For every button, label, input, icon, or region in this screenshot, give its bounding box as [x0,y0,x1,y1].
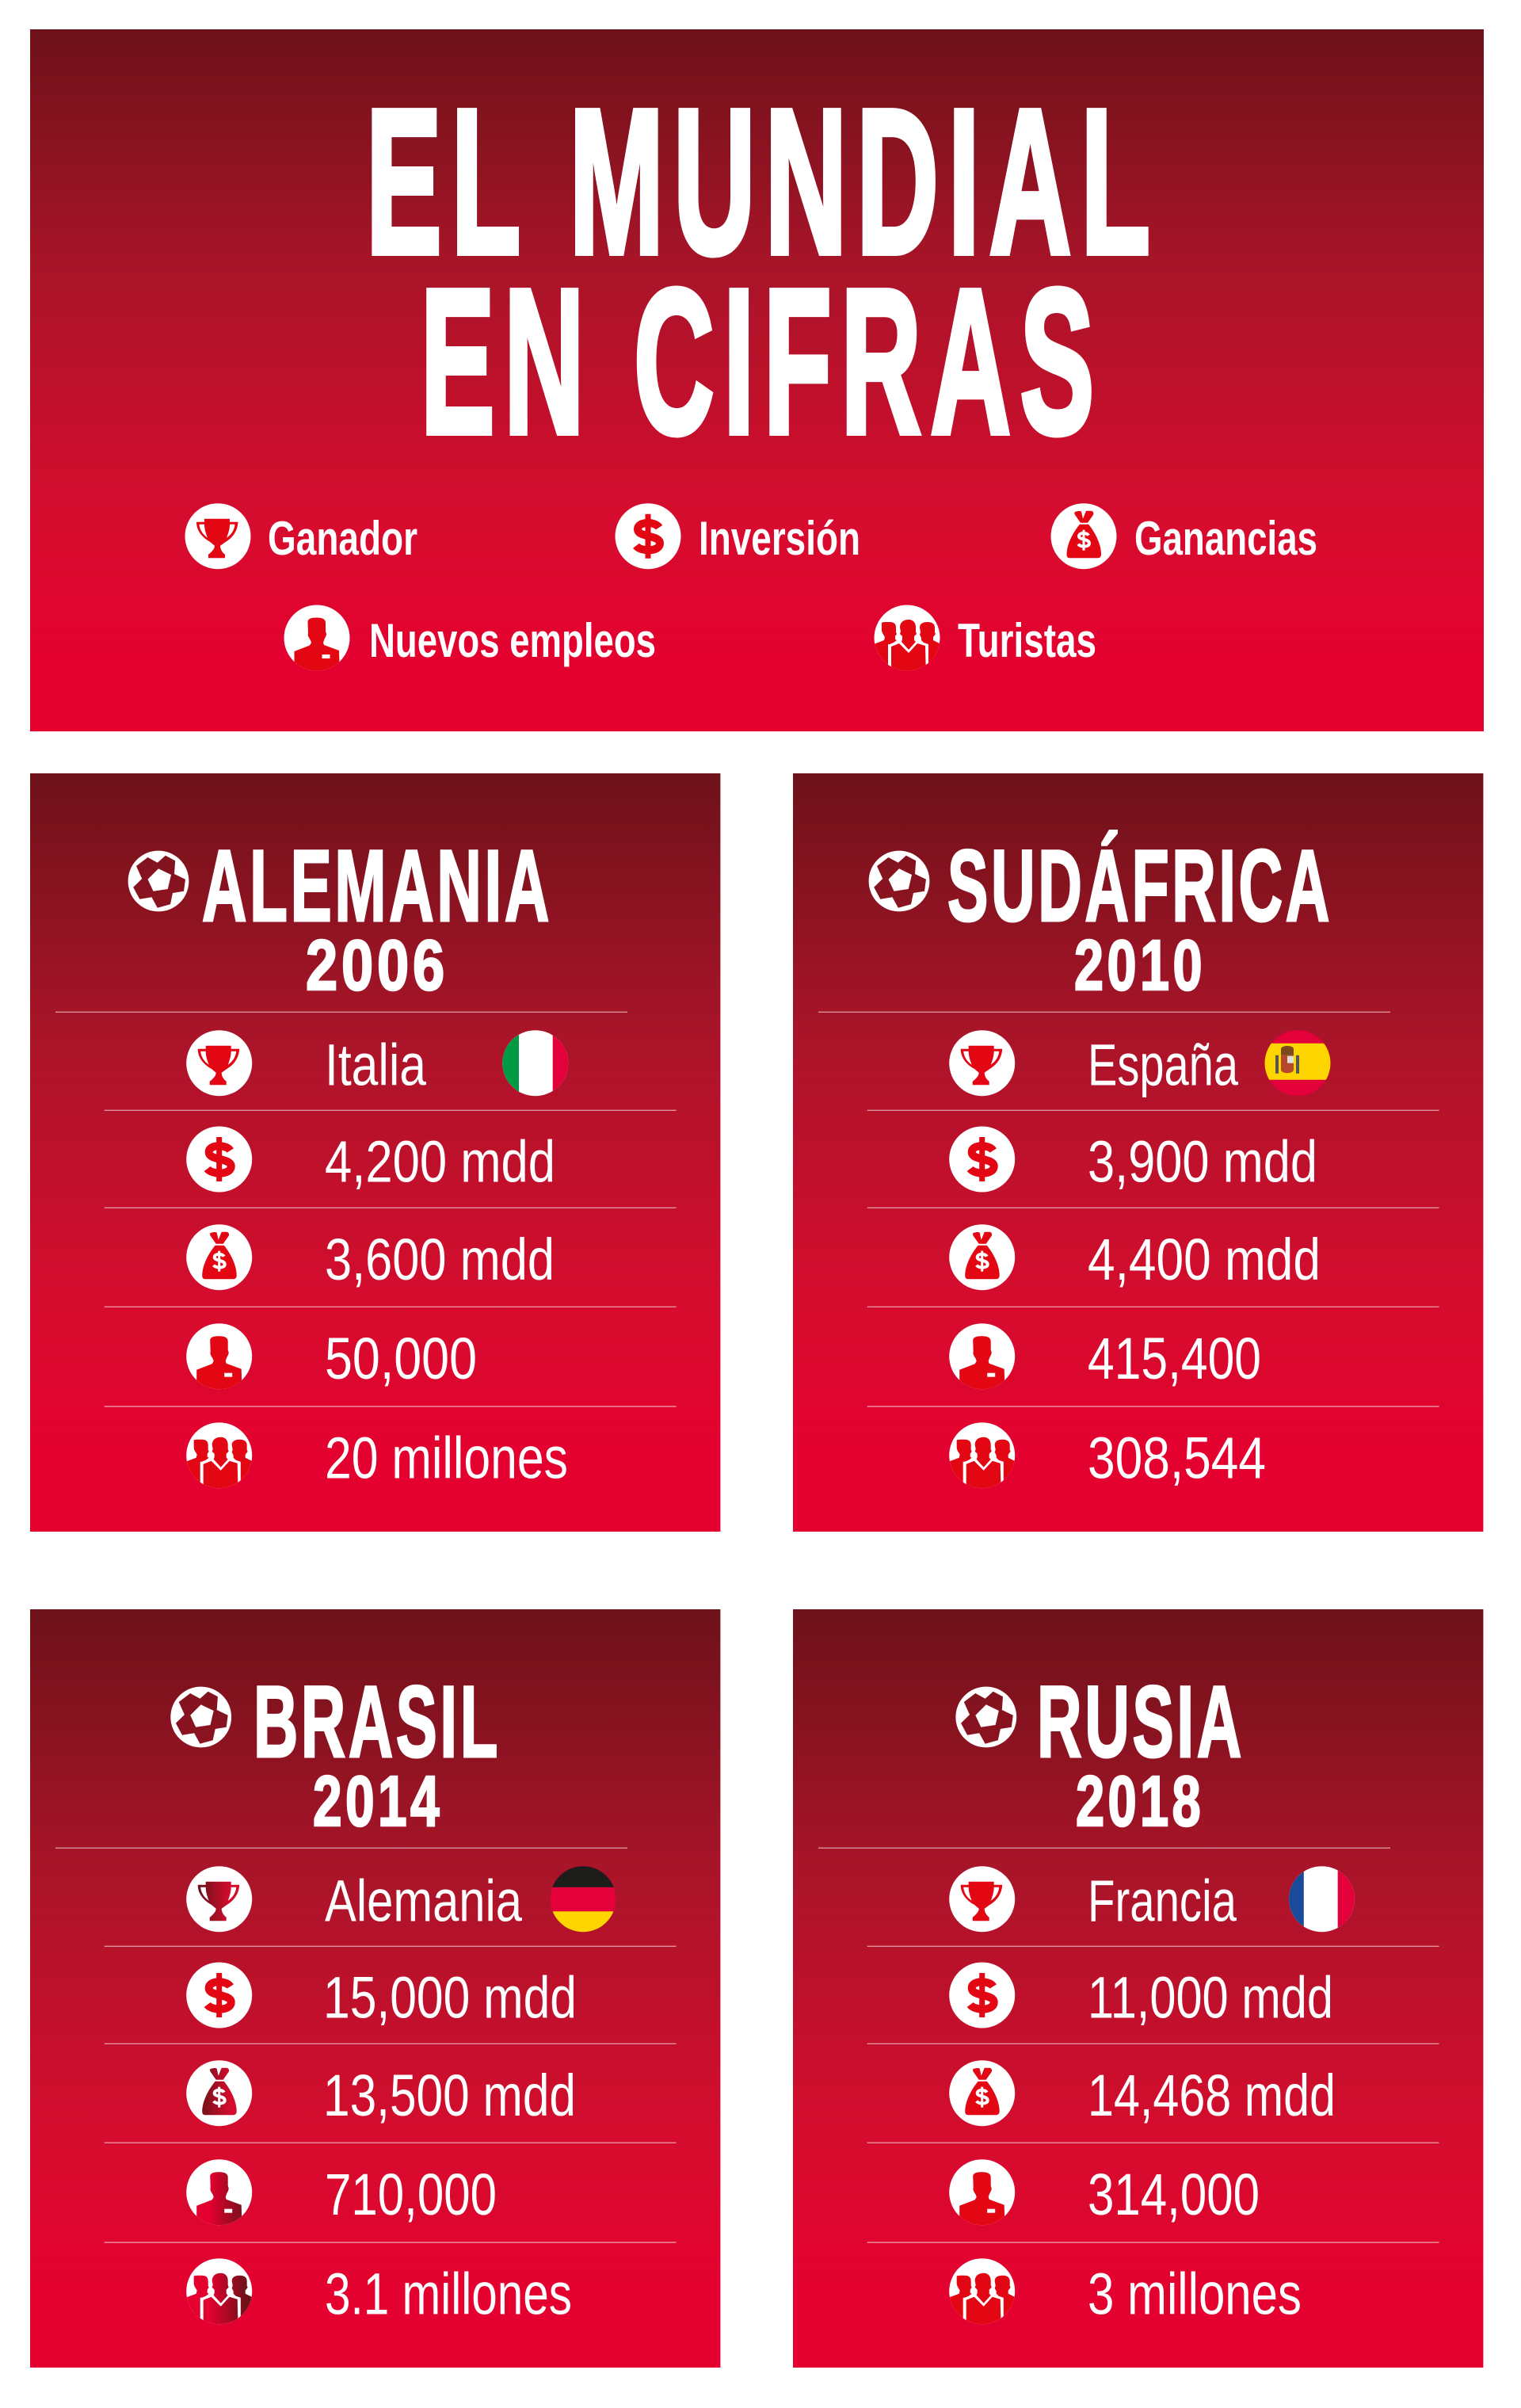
year: 2010 [1074,926,1206,1006]
investment: 11,000 mdd [1088,1965,1333,2030]
icon: money bag [186,1224,252,1290]
new jobs: 710,000 [325,2162,497,2227]
panel: Sudafrica 2010 [793,773,1483,1532]
winner: Italia [325,1032,427,1098]
legend: inversion [615,503,860,569]
coat of arms [1275,1046,1299,1074]
investment: 3,900 mdd [1088,1128,1317,1195]
flag: Germany [550,1866,616,1932]
investment: 15,000 mdd [323,1965,577,2030]
legend: ganancias [1050,503,1317,569]
country heading: RUSIA [1037,1666,1245,1779]
earnings: 4,400 mdd [1088,1227,1321,1292]
year: 2006 [306,926,448,1006]
flag: France [1289,1866,1355,1932]
earnings: 14,468 mdd [1088,2063,1336,2128]
icon: people [184,1422,255,1495]
legend: nuevos empleos: Nuevos empleos [369,614,656,667]
icon: people [947,2258,1018,2331]
icon: dollar [949,1962,1015,2028]
icon: trophy [186,1030,252,1096]
panel: Alemania 2006 [30,773,720,1532]
legend: turistas: Turistas [958,614,1096,667]
panel: Rusia 2018 [793,1609,1483,2368]
icon: money bag [186,2060,252,2126]
legend: ganador [185,503,417,569]
icon: dollar [186,1962,252,2028]
year: 2014 [313,1762,443,1841]
icon: soccer ball [955,1687,1016,1747]
legend: ganancias: Ganancias [1134,512,1317,565]
flag: Spain [1262,1030,1333,1096]
icon: person [949,1323,1015,1396]
icon: money bag [949,2060,1015,2126]
icon: trophy [186,1866,252,1932]
tourists: 3 millones [1088,2261,1302,2326]
panel: title header [30,29,1484,731]
tourists: 20 millones [325,1425,568,1491]
new jobs: 415,400 [1088,1326,1261,1391]
icon: soccer ball [128,851,189,911]
winner: España [1088,1032,1239,1098]
new jobs: 50,000 [325,1326,477,1391]
earnings: 3,600 mdd [325,1227,555,1292]
year: 2018 [1076,1762,1204,1841]
icon: soccer ball [170,1687,231,1747]
earnings: 13,500 mdd [323,2063,576,2128]
investment: 4,200 mdd [325,1128,555,1195]
panel: Brasil 2014 [30,1609,720,2368]
winner: Alemania [325,1868,523,1933]
legend: inversion: Inversión [699,512,860,565]
icon: dollar [186,1127,252,1192]
tourists: 308,544 [1088,1425,1266,1491]
icon: person [186,2159,252,2232]
winner: Francia [1088,1868,1237,1933]
legend: nuevos empleos [284,605,656,677]
legend: turistas [871,605,1096,677]
country heading: ALEMANIA [202,830,552,943]
icon: people [184,2258,255,2331]
icon: people [947,1422,1018,1495]
icon: soccer ball [869,851,929,911]
icon: trophy [949,1866,1015,1932]
tourists: 3.1 millones [325,2261,572,2326]
icon: person [949,2159,1015,2232]
country heading: BRASIL [254,1666,501,1779]
legend: ganador: Ganador [268,512,417,565]
icon: dollar [949,1127,1015,1192]
new jobs: 314,000 [1088,2162,1260,2227]
flag: Italy [502,1030,569,1097]
icon: trophy [949,1030,1015,1096]
icon: person [186,1323,252,1396]
icon: money bag [949,1224,1015,1290]
